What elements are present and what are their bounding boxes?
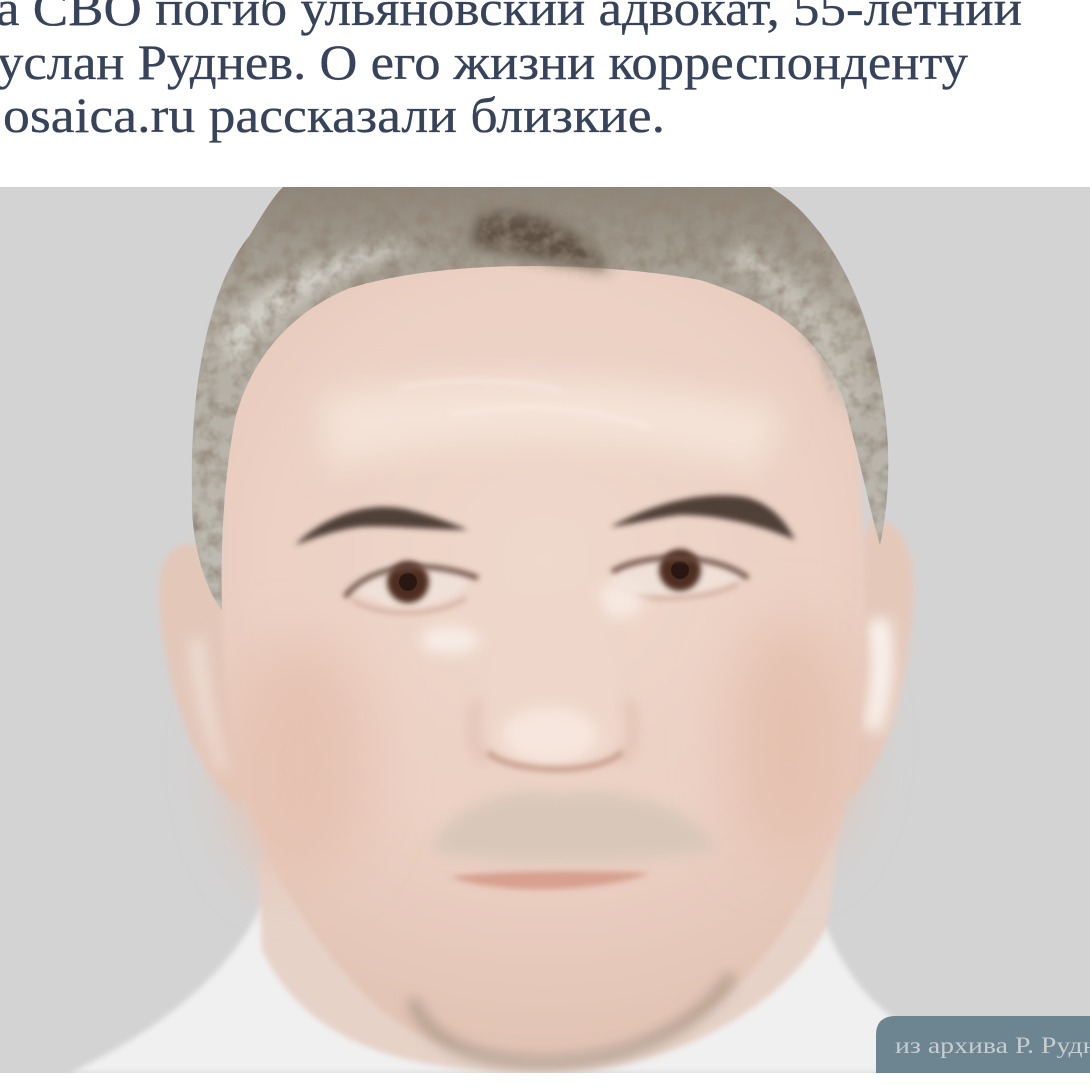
forehead crease <box>400 381 650 428</box>
under-eye highlights <box>420 626 480 654</box>
left eyebrow <box>295 507 468 545</box>
chin shadow <box>412 975 732 1062</box>
photo credit <box>876 1016 1090 1073</box>
photo credit: из архива Р. Руднева <box>895 1033 1090 1058</box>
stubble <box>430 792 718 862</box>
right cheek shading <box>730 620 850 860</box>
left cheek shading <box>230 640 370 880</box>
nose <box>468 703 638 775</box>
mouth <box>450 871 650 889</box>
right ear <box>851 520 914 794</box>
face <box>220 250 866 1057</box>
neck <box>258 840 836 1073</box>
shirt <box>74 910 893 1073</box>
right eyebrow <box>610 495 795 540</box>
left eye <box>345 561 478 613</box>
hair <box>192 187 888 610</box>
article text: osaica.ru рассказали близкие. <box>3 87 665 143</box>
article text: услан Руднев. О его жизни корреспонденту <box>0 34 968 90</box>
left ear <box>158 543 241 804</box>
forehead highlight <box>320 380 780 470</box>
right eye <box>610 549 748 598</box>
article text <box>0 0 1022 143</box>
